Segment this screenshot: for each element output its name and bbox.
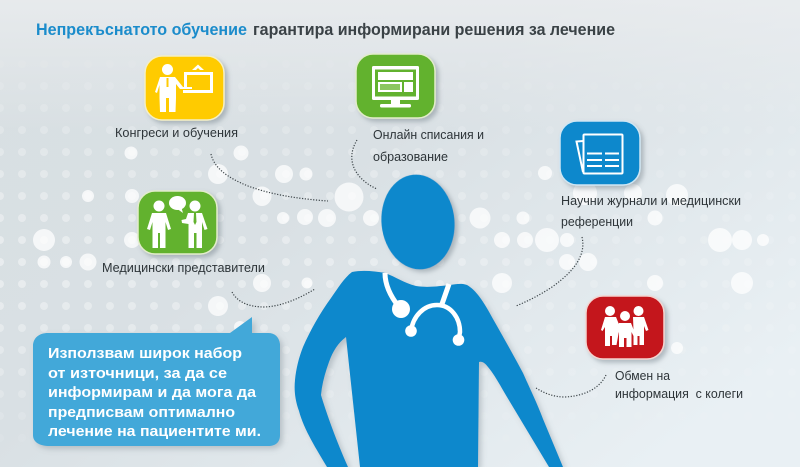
icon: congresses and training [145,56,224,120]
label: congresses: Конгреси и обучения [115,125,238,140]
dotted connector: congresses [211,154,328,201]
dotted connector: medical representatives [232,289,315,307]
icon: exchange with colleagues [586,296,664,359]
label: scientific journals: референции [561,214,633,229]
label: online journals: образование [373,149,448,164]
title: Непрекъснатото обучение [36,21,247,39]
speech bubble callout: от източници, за да се [48,366,227,382]
label: exchange with colleagues: информация с колеги [615,386,743,401]
label: medical representatives: Медицински представители [102,260,265,275]
doctor figure [295,171,563,467]
speech bubble callout [33,317,280,446]
dotted connector: online journals [352,140,377,189]
doctor head [377,171,459,273]
speech bubble callout: информирам и да мога да [48,385,257,401]
icon: medical representatives [138,191,217,254]
speech bubble callout: лечение на пациентите ми. [48,424,261,440]
label: exchange with colleagues: Обмен на [615,368,671,383]
label: scientific journals [561,193,741,229]
stethoscope [385,273,464,346]
speech bubble callout: Използвам широк набор [48,346,242,362]
label: online journals [373,127,484,164]
speech bubble callout: предписвам оптимално [48,405,235,421]
label: scientific journals: Научни журнали и медицински [561,193,741,208]
icon: online journals [356,54,435,118]
doctor body [295,271,563,467]
title [36,21,615,39]
title: гарантира информирани решения за лечение [253,21,615,39]
label: exchange with colleagues [615,368,743,401]
icon: scientific journals [560,121,640,185]
dotted connector: scientific journals [516,237,583,306]
dotted connector: colleagues [536,375,606,397]
label: online journals: Онлайн списания и [373,127,484,142]
